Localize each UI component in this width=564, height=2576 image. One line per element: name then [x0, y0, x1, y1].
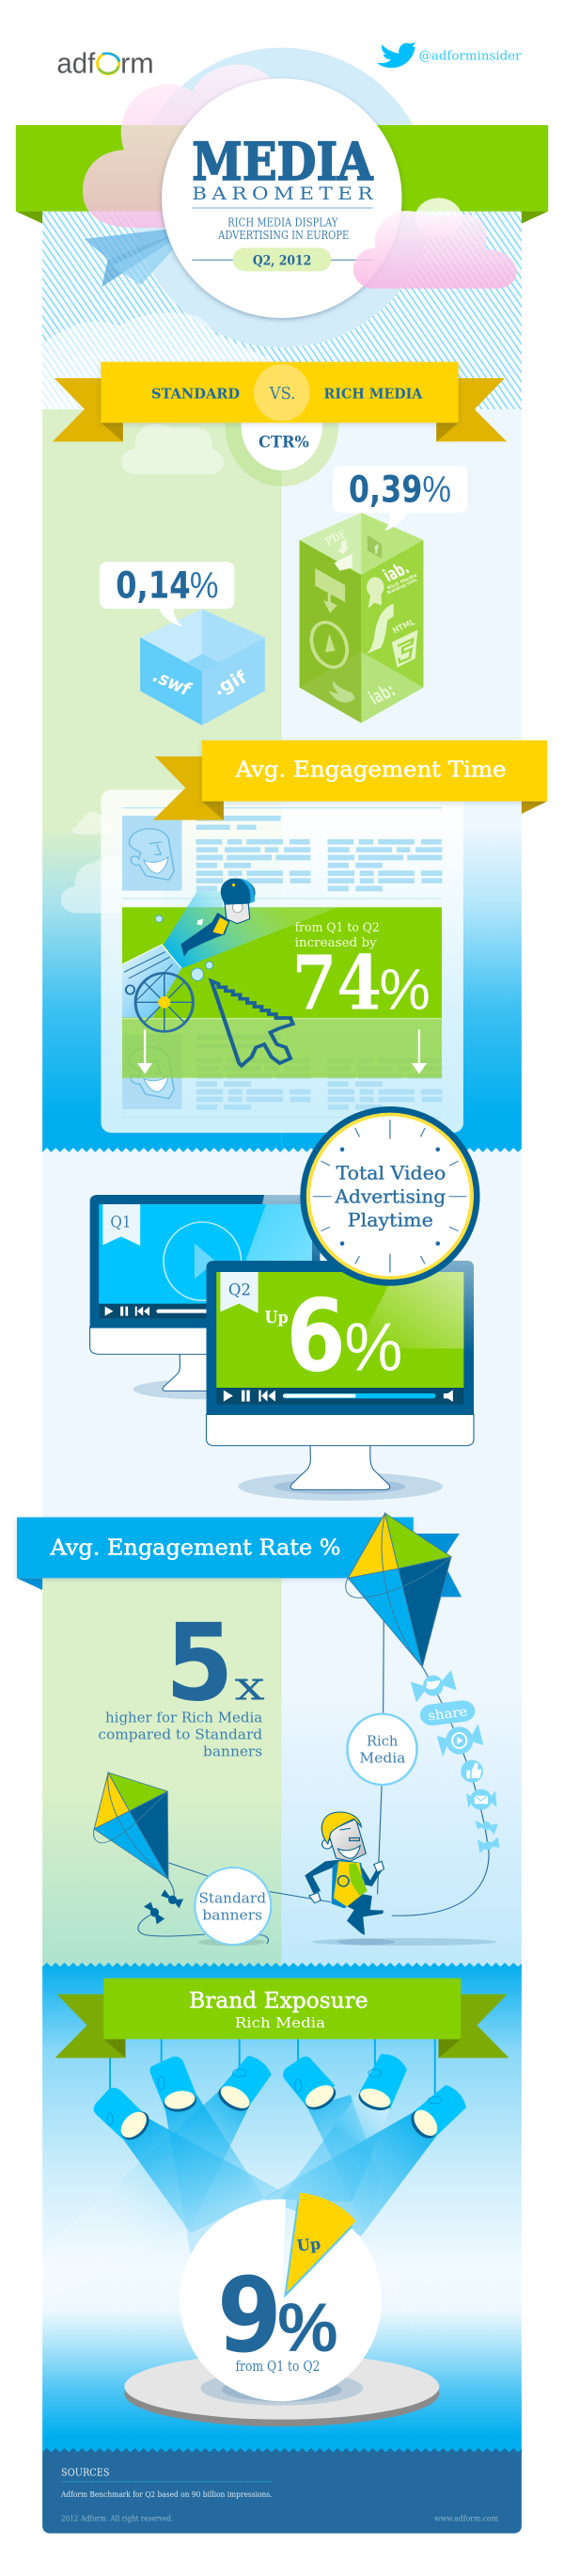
cannon: [122, 945, 193, 1031]
bubble: 0,39%: %: [422, 469, 451, 510]
arrow right: [412, 1029, 427, 1074]
twitter bird icon: [377, 42, 415, 68]
website: www.adform.com: [434, 2515, 498, 2523]
icon: iab badge: [367, 557, 418, 609]
ground shadows: [198, 1938, 497, 1946]
share pill: [418, 1699, 477, 1726]
stat description: compared to Standard: [98, 1726, 263, 1742]
article page card: [101, 789, 463, 1133]
yellow ribbon: avg engagement time: [153, 740, 547, 820]
kite tail social bows: [411, 1670, 500, 1853]
adform logo: [56, 46, 154, 79]
top article text bars: [196, 816, 442, 891]
monitor Q1: [90, 1195, 320, 1399]
monitor Q2: 6: [286, 1278, 346, 1394]
footer panel: [42, 2452, 522, 2534]
yellow ribbon: avg engagement time: Avg. Engagement Time: [235, 756, 506, 782]
businessman holding kites: [305, 1812, 384, 1935]
icon: iab badge: Rich Media: [386, 573, 418, 591]
pie wedge up: Up: [296, 2235, 321, 2255]
engagement stat text: increased by: [295, 936, 377, 950]
stat description: higher for Rich Media: [105, 1709, 262, 1725]
monitor Q1: Q1: [110, 1214, 132, 1232]
subtitle: ADVERTISING IN EUROPE: [217, 230, 349, 243]
twitter handle: @adforminsider: [419, 49, 522, 63]
icon: iab badge: Brandings Units: [386, 578, 418, 596]
icon: iab badge: iab.: [379, 557, 413, 586]
green ribbon: brand exposure: Rich Media: [235, 2014, 325, 2031]
spotlight beams: [10, 2091, 437, 2333]
rich media label: Media: [359, 1749, 406, 1766]
flying man: [180, 879, 256, 957]
small kite bows: [144, 1889, 183, 1924]
bubbles: [155, 915, 212, 980]
stat: 9%: %: [277, 2289, 337, 2366]
icon: facebook: [368, 534, 382, 558]
engagement stat text: %: [379, 958, 431, 1023]
source line: Adform Benchmark for Q2 based on 90 billion impressions.: [60, 2490, 272, 2500]
white cloud over stripes: [42, 312, 274, 411]
icon: pdf download: [322, 528, 352, 571]
blue ribbon: avg engagement rate: [17, 1518, 462, 1597]
adform logo: adf: [56, 46, 96, 79]
green box: rich media formats: [300, 513, 423, 723]
subtitle: [192, 207, 373, 243]
sources heading: SOURCES: [61, 2466, 110, 2478]
paper plane: [85, 226, 195, 287]
brand exposure section: [10, 1963, 522, 2453]
spotlight 4: [283, 2039, 341, 2114]
standard banners label: [195, 1868, 271, 1945]
monitor Q2: [207, 1261, 474, 1501]
clock title: Advertising: [334, 1186, 446, 1208]
footer section: [42, 2448, 522, 2534]
icon: twitter bird: [329, 680, 355, 703]
small bows: [476, 1821, 500, 1853]
faint cloud: [121, 424, 224, 474]
icon: flash: [367, 604, 394, 654]
icon: pdf download: PDF: [322, 528, 350, 549]
title circle: [162, 78, 402, 318]
icon: expanding banner: [315, 568, 345, 613]
pixel cursor: [212, 981, 293, 1066]
right column background: [282, 409, 522, 1151]
icon: iab logo: iab:: [365, 679, 400, 709]
date pill: Q2, 2012: [253, 253, 311, 268]
green ribbon: brand exposure: Brand Exposure: [189, 1988, 368, 2013]
adform logo: rm: [120, 46, 154, 79]
CTR section: [53, 362, 507, 725]
bubble: 0,39%: [333, 466, 467, 531]
right pink cloud: [353, 198, 517, 289]
pie wedge up: [284, 2193, 356, 2298]
green header band: [16, 125, 548, 224]
stat: 5x: x: [234, 1663, 265, 1709]
light beam: [164, 892, 337, 968]
stat: 9%: [217, 2255, 337, 2376]
white pie disc: [180, 2200, 382, 2401]
left column background: [42, 409, 282, 1151]
bubble: 0,14%: %: [190, 564, 219, 606]
arrow left: [137, 1029, 152, 1074]
copyright: 2012 Adform. All right reserved.: [61, 2515, 173, 2523]
CTR label: CTR%: [258, 434, 309, 452]
CTR dial ring: [225, 365, 338, 486]
stat: 5x: 5: [165, 1601, 234, 1725]
title MEDIA: MEDIA: [192, 132, 373, 193]
standard banners label: Standard: [198, 1889, 266, 1906]
faint clouds: [61, 812, 164, 914]
monitor Q2: Up: [264, 1308, 289, 1328]
top portrait: [122, 816, 181, 891]
date pill: [192, 247, 373, 271]
striped sky panel: [42, 212, 522, 410]
video playtime section: [42, 1106, 522, 1582]
right column background: [282, 1578, 522, 1966]
yellow ribbon: standard vs rich media: STANDARD: [151, 386, 240, 402]
stat: 9%: 9: [217, 2255, 282, 2376]
lower article text bars: [196, 1034, 442, 1110]
yellow ribbon: standard vs rich media: VS.: [269, 385, 295, 404]
stat description: [98, 1709, 263, 1759]
section: standard vs rich media and engagement time background: [42, 409, 522, 1151]
blue box: standard formats: .swf: [149, 665, 195, 700]
clock title: Total Video: [337, 1163, 446, 1185]
icon: html5: [391, 617, 417, 667]
engagement rate section: [17, 1513, 522, 1966]
blue box: standard formats: .gif: [208, 666, 251, 699]
yellow ribbon: standard vs rich media: RICH MEDIA: [324, 386, 422, 402]
green ribbon: brand exposure: [55, 1979, 509, 2058]
bubble: 0,39%: 0,39: [349, 468, 422, 511]
spotlights: [94, 2037, 466, 2144]
icon: facebook: f: [374, 543, 379, 557]
green highlight block: [122, 907, 442, 1078]
yellow ribbon: standard vs rich media: [53, 362, 507, 441]
clock title: Playtime: [348, 1210, 433, 1232]
small kite: [94, 1773, 168, 1879]
zigzag divider: [42, 1148, 522, 1153]
spotlight 1: [94, 2058, 155, 2144]
bow: twitter: [411, 1670, 457, 1702]
icon: html5: HTML: [391, 617, 417, 636]
monitor Q2: Q2: [228, 1281, 251, 1299]
left pink cloud: [83, 64, 284, 228]
rich media label: [347, 1714, 417, 1785]
icon: play button: [306, 619, 352, 671]
clock badge: [300, 1106, 480, 1286]
spotlight 5: [354, 2037, 407, 2114]
bubble: 0,14%: 0,14: [116, 564, 191, 607]
stage plate: [124, 2354, 439, 2426]
spotlight 2: [149, 2039, 198, 2114]
bow: play: [437, 1724, 483, 1757]
header section: [16, 42, 548, 411]
rich media label: Rich: [367, 1732, 399, 1749]
standard banners label: banners: [202, 1907, 262, 1923]
title BAROMETER: BAROMETER: [192, 183, 373, 204]
lower portrait: [122, 1034, 181, 1109]
blue ribbon: avg engagement rate: Avg. Engagement Rate %: [50, 1534, 341, 1560]
share pill: share: [427, 1704, 468, 1724]
blue gradient background: [42, 1966, 522, 2453]
blue box: standard formats: [140, 609, 265, 725]
kite strings and tail: [138, 1590, 489, 1944]
clock ticks: [313, 1120, 466, 1273]
clock title: [334, 1163, 446, 1232]
engagement time section: [61, 740, 547, 1133]
bow: mail: [466, 1789, 496, 1810]
stat: 9%: from Q1 to Q2: [235, 2358, 320, 2375]
light blue ring behind title: [132, 48, 431, 347]
left column background: [42, 1578, 282, 1966]
spotlight 6: [406, 2039, 466, 2142]
engagement stat text: 74: [292, 939, 382, 1027]
large kite: [346, 1513, 451, 1667]
section background: [42, 1153, 522, 1582]
icon: thumb: [461, 1760, 483, 1783]
zigzag divider: [42, 1963, 522, 1967]
bubble: 0,14%: [100, 562, 234, 627]
spotlight 3: [213, 2039, 272, 2116]
engagement stat text: from Q1 to Q2: [295, 921, 380, 935]
monitor Q2: %: [344, 1309, 402, 1385]
stat description: banners: [203, 1743, 262, 1759]
subtitle: RICH MEDIA DISPLAY: [227, 216, 338, 230]
zigzag divider: [42, 2448, 522, 2453]
